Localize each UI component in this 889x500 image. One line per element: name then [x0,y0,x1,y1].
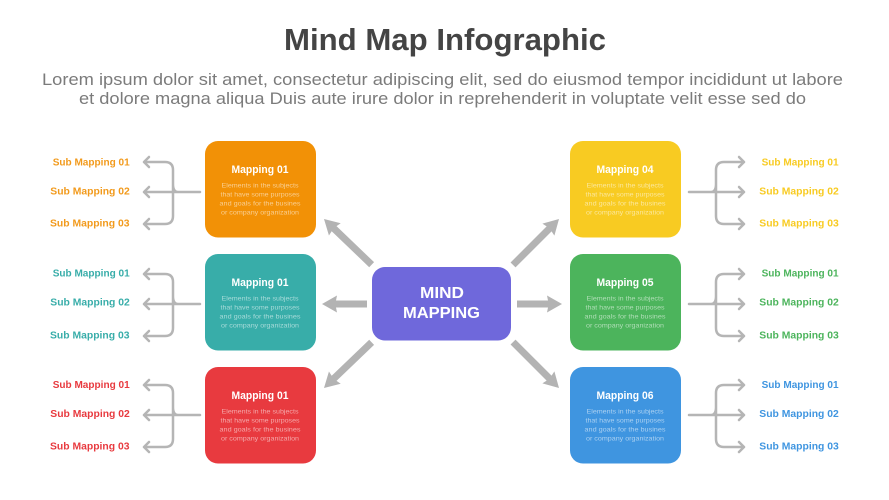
panel: mapping 06 blue: and goals for the busines [584,426,666,434]
panel: mapping 01 orange [205,141,316,238]
arrow: center to middle left [322,296,367,312]
sub mapping labels: red: Sub Mapping 01 [53,379,130,391]
panel: mapping 01 orange: Mapping 01 [232,164,288,176]
panel: mapping 04 yellow: Mapping 04 [596,164,654,176]
sub mapping labels: teal [50,268,130,342]
panel: mapping 01 teal: and goals for the busines [220,314,301,320]
panel: mapping 06 blue: that have some purposes [586,418,665,424]
sub mapping labels: green: Sub Mapping 01 [762,268,839,280]
subtitle text [42,70,843,108]
connector: orange branch arrows [144,157,200,229]
arrow: center to lower right [507,336,565,394]
sub mapping labels: green: Sub Mapping 02 [759,296,839,308]
panel: mapping 01 orange: Elements in the subjects [222,182,299,190]
sub mapping labels: yellow: Sub Mapping 02 [759,186,839,198]
panel: mapping 01 orange: that have some purposes [220,192,300,198]
connector: red branch arrows [144,380,200,452]
panel: mapping 04 yellow [570,141,681,238]
panel: mapping 01 orange: or company organization [221,210,299,216]
sub mapping labels: teal: Sub Mapping 02 [50,296,130,308]
central node: mind mapping [372,267,511,340]
sub mapping labels: yellow [759,156,839,230]
sub mapping labels: blue: Sub Mapping 03 [759,440,839,452]
sub mapping labels: red: Sub Mapping 03 [50,440,130,452]
panel: mapping 06 blue: or company organization [586,436,664,442]
sub mapping labels: teal: Sub Mapping 01 [53,268,130,280]
arrow: center to upper right [507,213,565,271]
panel: mapping 01 red: Elements in the subjects [222,408,299,416]
panel: mapping 01 red: Mapping 01 [232,390,288,402]
panel: mapping 01 red [205,367,316,464]
sub mapping labels: blue: Sub Mapping 02 [759,408,839,420]
sub mapping labels: red: Sub Mapping 02 [50,408,130,420]
title: Mind Map Infographic [284,22,606,57]
panel: mapping 01 teal: Elements in the subjects [222,296,299,302]
panel: mapping 05 green: Mapping 05 [596,277,654,289]
panel: mapping 06 blue [570,367,681,464]
sub mapping labels: yellow: Sub Mapping 01 [762,156,839,168]
sub mapping labels: orange: Sub Mapping 03 [50,218,130,230]
subtitle text: Lorem ipsum dolor sit amet, consectetur adipiscing elit, sed do eiusmod tempor incididunt ut labore [42,70,843,89]
sub mapping labels: blue: Sub Mapping 01 [762,379,839,391]
panel: mapping 05 green: Elements in the subjects [586,296,664,302]
panel: mapping 01 orange: and goals for the busines [220,200,301,208]
panel: mapping 01 teal [205,254,316,350]
panel: mapping 01 red: and goals for the busines [220,426,301,434]
panel: mapping 05 green [570,254,681,350]
connector: blue branch arrows [689,380,744,452]
central node: mind mapping: MIND [420,285,464,302]
panel: mapping 04 yellow: that have some purposes [586,192,665,198]
central node: mind mapping: MAPPING [403,305,480,322]
sub mapping labels: orange: Sub Mapping 01 [53,156,130,168]
sub mapping labels: teal: Sub Mapping 03 [50,330,130,342]
panel: mapping 06 blue: Mapping 06 [596,390,654,402]
panel: mapping 01 red: that have some purposes [220,418,300,424]
panel: mapping 01 teal: that have some purposes [220,304,300,312]
connector: green branch arrows [689,269,744,341]
connector: yellow branch arrows [689,157,744,229]
panel: mapping 01 red: or company organization [221,436,299,442]
panel: mapping 05 green: that have some purposes [586,304,665,312]
sub mapping labels: yellow: Sub Mapping 03 [759,218,839,230]
arrow: center to upper left [318,213,378,271]
panel: mapping 05 green: and goals for the busines [584,314,666,320]
sub mapping labels: orange [50,156,130,230]
sub mapping labels: orange: Sub Mapping 02 [50,186,130,198]
panel: mapping 04 yellow: and goals for the busines [584,200,666,208]
sub mapping labels: red [50,379,130,452]
panel: mapping 04 yellow: or company organization [586,210,664,216]
arrow: center to middle right [517,296,562,312]
panel: mapping 05 green: or company organization [586,322,664,330]
panel: mapping 04 yellow: Elements in the subjects [586,182,664,190]
sub mapping labels: green: Sub Mapping 03 [759,330,839,342]
panel: mapping 01 teal: or company organization [221,322,299,330]
sub mapping labels: green [759,268,839,342]
subtitle text: et dolore magna aliqua Duis aute irure dolor in reprehenderit in voluptate velit esse sed do [79,89,806,108]
panel: mapping 01 teal: Mapping 01 [232,277,288,289]
sub mapping labels: blue [759,379,839,452]
arrow: center to lower left [318,336,378,394]
panel: mapping 06 blue: Elements in the subjects [586,408,664,416]
connector: teal branch arrows [144,269,200,341]
